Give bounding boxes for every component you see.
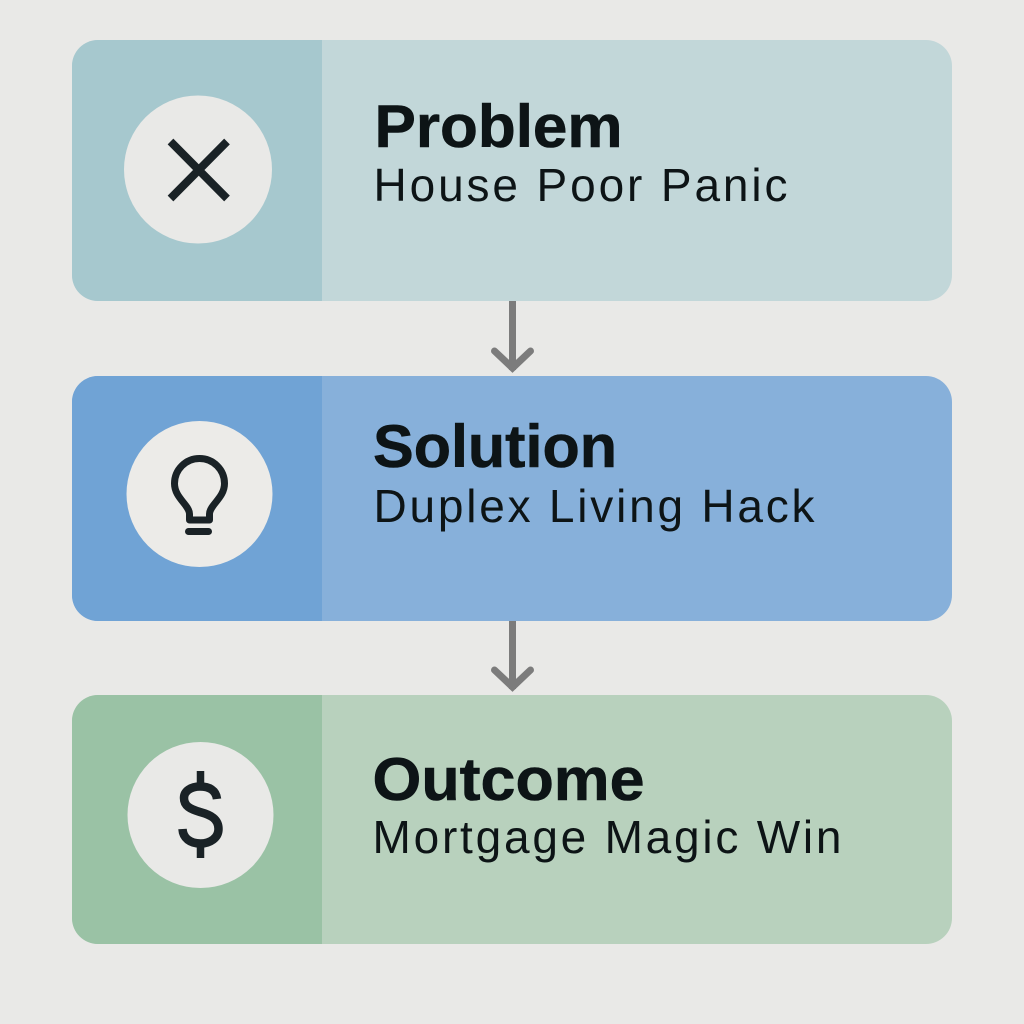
icon: cross <box>124 96 272 244</box>
panel: outcome <box>72 695 952 944</box>
heading: solution: Solution <box>373 413 617 480</box>
text: problem detail: House Poor Panic <box>374 159 788 211</box>
arrow: problem to solution <box>494 301 530 370</box>
icon: light bulb <box>126 421 272 567</box>
heading: problem: Problem <box>374 93 622 160</box>
heading: outcome: Outcome <box>372 746 644 813</box>
text: solution detail: Duplex Living Hack <box>374 480 816 532</box>
icon: dollar sign <box>128 742 274 888</box>
panel: solution <box>72 376 952 621</box>
panel: problem <box>72 40 952 301</box>
text: outcome detail: Mortgage Magic Win <box>372 811 842 863</box>
arrow: solution to outcome <box>494 621 530 689</box>
